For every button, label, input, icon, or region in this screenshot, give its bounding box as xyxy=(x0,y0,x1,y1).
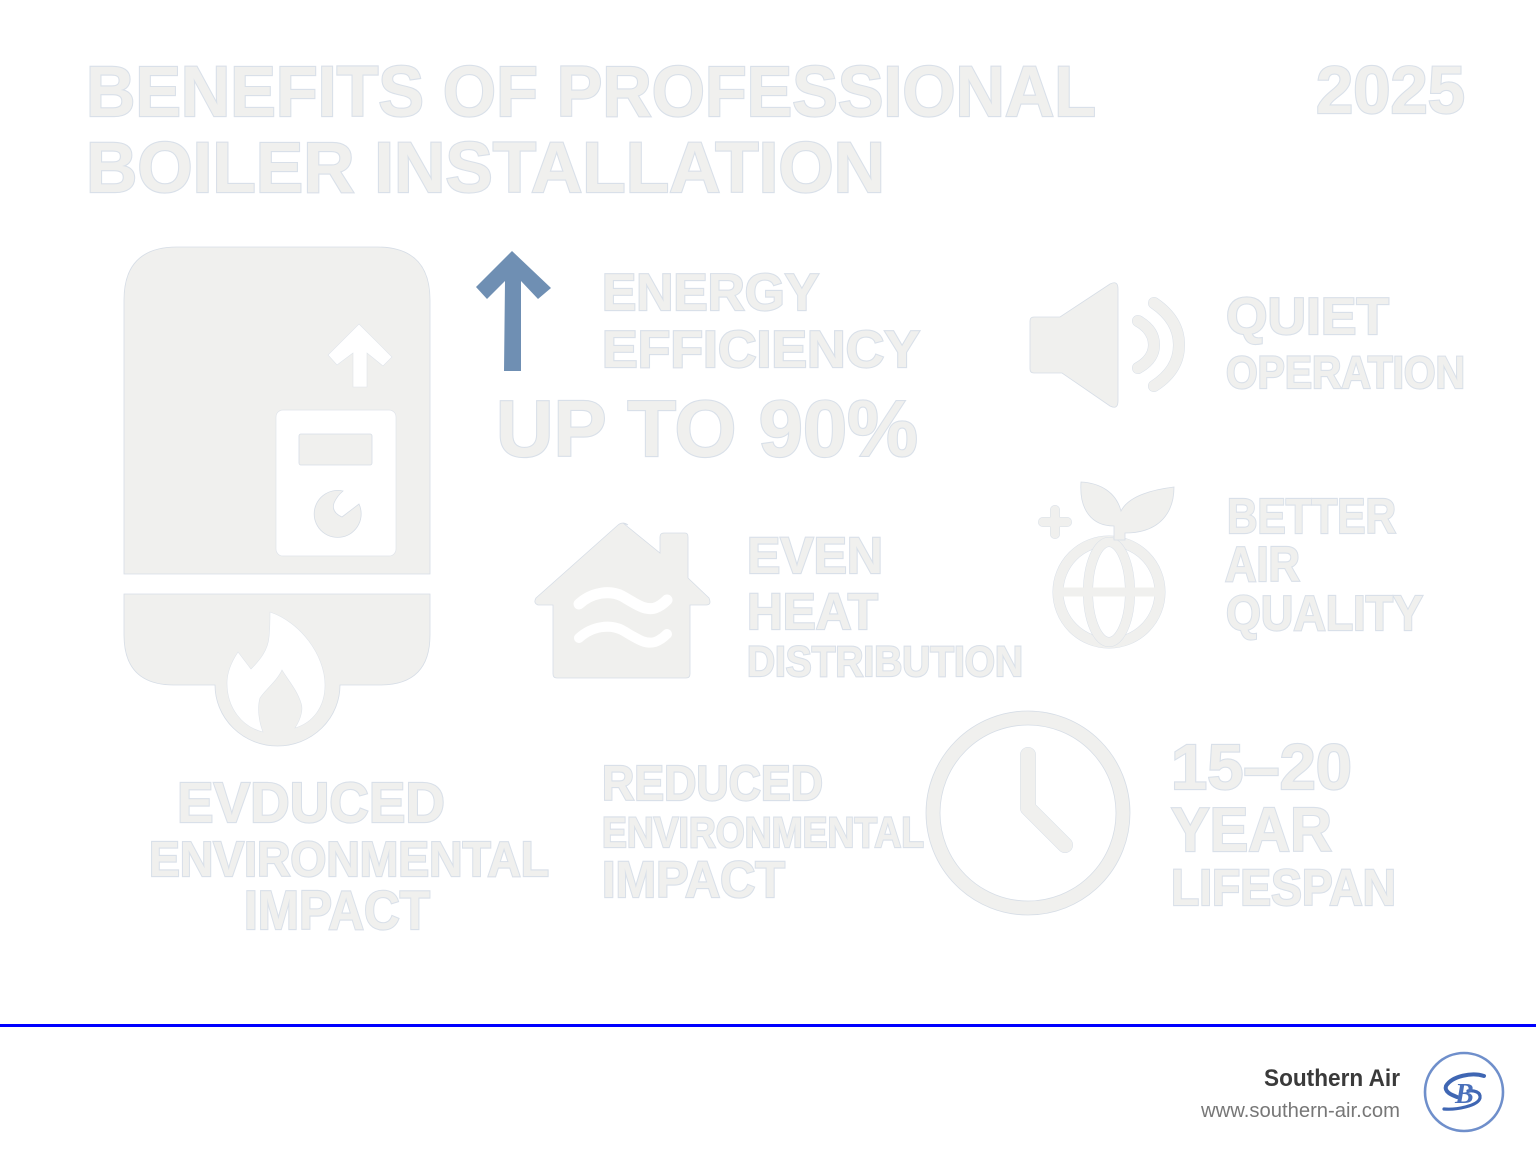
reduced environmental impact label, centre: REDUCED xyxy=(602,757,823,811)
lifespan label: YEAR xyxy=(1171,796,1332,865)
better air quality label: AIR xyxy=(1225,538,1300,592)
reduced environmental impact label, left: ENVIRONMENTAL xyxy=(149,833,549,887)
energy efficiency label xyxy=(602,264,920,379)
icon: blue up arrow xyxy=(476,251,551,371)
boiler burner with flame xyxy=(124,594,430,746)
even heat distribution label xyxy=(747,527,1023,686)
reduced environmental impact label, left xyxy=(149,771,549,941)
better air quality label: BETTER xyxy=(1227,490,1396,544)
quiet operation label xyxy=(1226,288,1465,398)
energy efficiency label: EFFICIENCY xyxy=(602,321,920,379)
footer rule xyxy=(0,1024,1536,1027)
icon: globe with leaves xyxy=(1043,482,1174,643)
energy efficiency label: ENERGY xyxy=(602,264,819,322)
up to 90% stat: UP TO 90% xyxy=(496,384,918,473)
icon: boiler xyxy=(124,247,430,746)
lifespan label: 15–20 xyxy=(1171,731,1352,803)
lifespan label: LIFESPAN xyxy=(1171,859,1396,916)
boiler control panel xyxy=(276,410,396,556)
title: BOILER INSTALLATION xyxy=(86,129,885,208)
quiet operation label: QUIET xyxy=(1226,288,1389,346)
year: 2025 xyxy=(1316,53,1465,128)
boiler body xyxy=(124,247,430,574)
logo: B xyxy=(1454,1079,1474,1110)
lifespan label xyxy=(1171,731,1396,916)
reduced environmental impact label, centre xyxy=(602,757,924,908)
title: BENEFITS OF PROFESSIONAL xyxy=(86,53,1096,132)
footer brand name: Southern Air xyxy=(1264,1065,1400,1092)
reduced environmental impact label, left: IMPACT xyxy=(244,879,430,941)
even heat distribution label: HEAT xyxy=(747,583,878,640)
reduced environmental impact label, left: EVDUCED xyxy=(177,771,445,835)
better air quality label: QUALITY xyxy=(1226,587,1423,641)
logo xyxy=(1425,1053,1503,1131)
title xyxy=(86,53,1096,208)
reduced environmental impact label, centre: IMPACT xyxy=(602,851,785,908)
icon: house with heat waves xyxy=(535,523,710,678)
even heat distribution label: DISTRIBUTION xyxy=(747,638,1023,686)
even heat distribution label: EVEN xyxy=(747,527,883,584)
quiet operation label: OPERATION xyxy=(1226,347,1465,398)
reduced environmental impact label, centre: ENVIRONMENTAL xyxy=(602,809,924,857)
better air quality label xyxy=(1225,490,1423,641)
icon: clock xyxy=(926,711,1130,915)
footer website: www.southern-air.com xyxy=(1200,1100,1400,1122)
icon: speaker xyxy=(1030,283,1179,407)
boiler up arrow xyxy=(328,324,392,387)
